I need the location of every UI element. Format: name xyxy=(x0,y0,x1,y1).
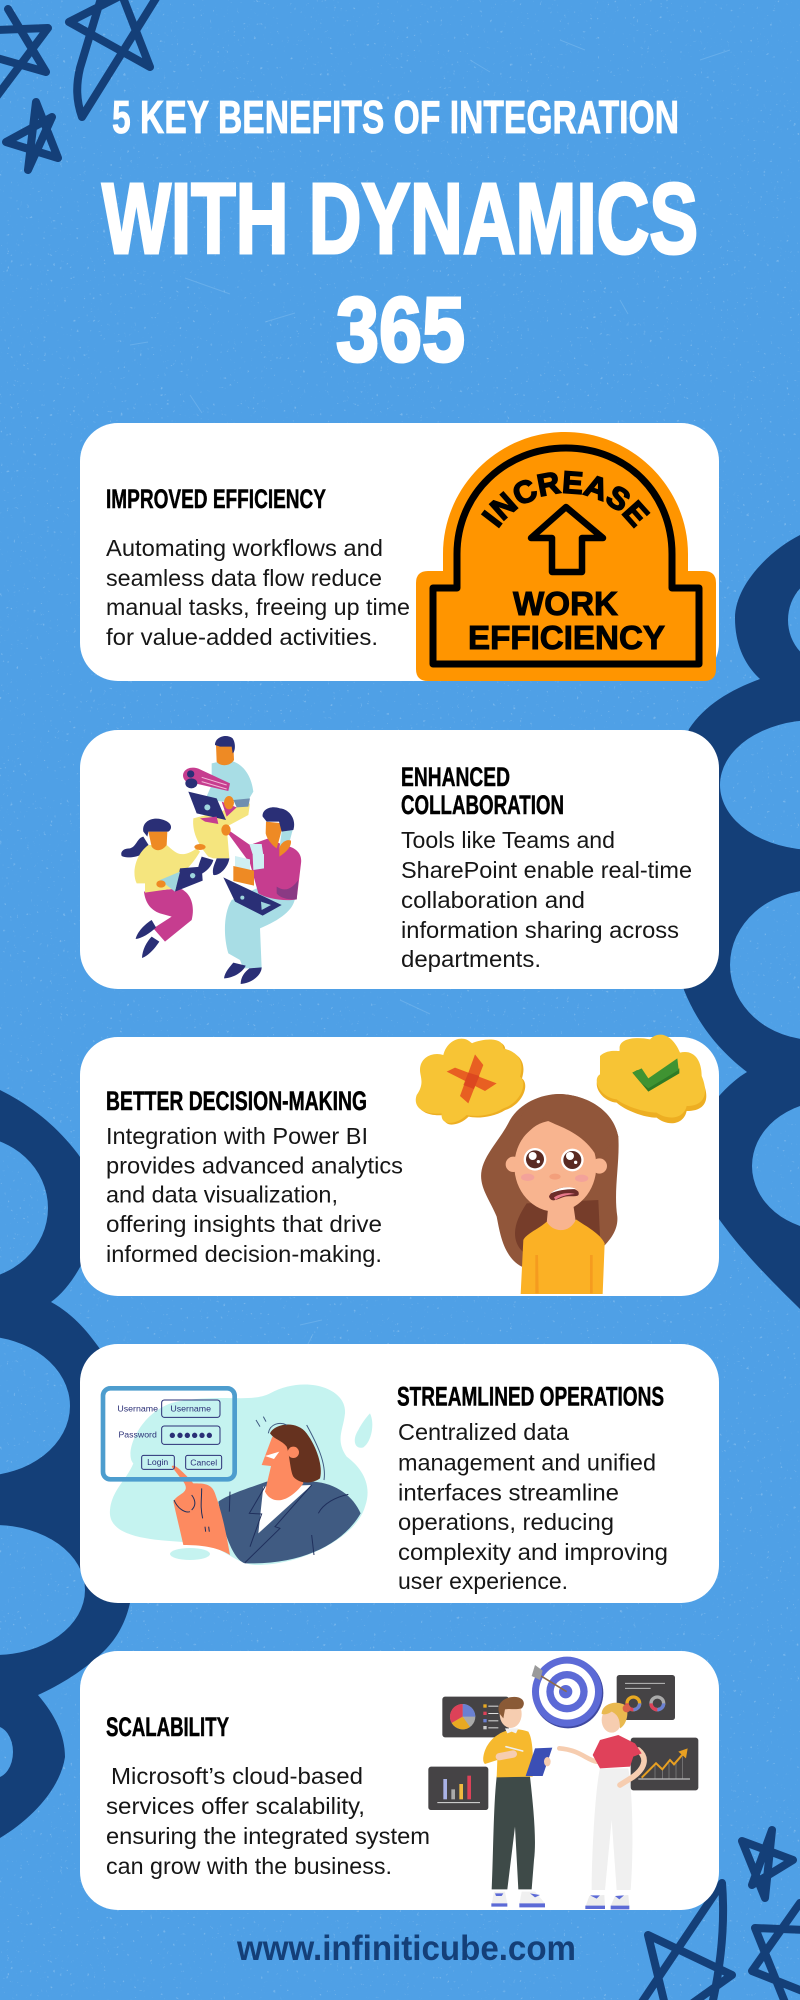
decorative blob: right scalloped ring xyxy=(670,500,800,1340)
heading: enhanced collaboration: ENHANCED xyxy=(401,762,510,792)
body text: enhanced collaboration: Tools like Teams and xyxy=(401,827,615,853)
body text: improved efficiency: manual tasks, freeing up time xyxy=(106,594,410,620)
heading: enhanced collaboration: COLLABORATION xyxy=(401,790,564,820)
body text: streamlined operations: user experience. xyxy=(398,1568,568,1594)
body text: scalability: can grow with the business. xyxy=(106,1853,392,1879)
illustration: person using login screen: Username xyxy=(117,1404,158,1414)
cloud with cross xyxy=(418,1040,525,1125)
girl xyxy=(481,1094,619,1267)
title xyxy=(102,91,698,381)
panel: better decision-making xyxy=(80,1035,719,1296)
body text: streamlined operations: Centralized data xyxy=(398,1419,569,1445)
bar chart xyxy=(437,1801,480,1804)
panel: improved efficiency xyxy=(80,423,719,681)
woman xyxy=(121,837,151,857)
heading: streamlined operations: STREAMLINED OPERATIONS xyxy=(397,1382,664,1412)
body text: scalability: ensuring the integrated system xyxy=(106,1823,430,1849)
chart panels xyxy=(442,1697,509,1737)
body text: streamlined operations: operations, reducing xyxy=(398,1509,614,1535)
heading: enhanced collaboration xyxy=(401,762,564,820)
illustration: person using login screen xyxy=(103,1384,372,1565)
donut charts xyxy=(625,1683,665,1688)
body text: better decision-making: informed decision-making. xyxy=(106,1241,382,1267)
illustration: person using login screen: Username xyxy=(170,1404,211,1414)
body text: better decision-making: Integration with Power BI xyxy=(106,1123,368,1149)
body text: scalability: services offer scalability, xyxy=(106,1793,365,1819)
target xyxy=(533,1658,603,1728)
body text: improved efficiency xyxy=(106,535,410,650)
panel: enhanced collaboration xyxy=(80,730,719,989)
cloud with check mark xyxy=(597,1038,706,1123)
body text: scalability: Microsoft’s cloud-based xyxy=(111,1763,363,1789)
body text: scalability xyxy=(106,1763,430,1879)
body text: better decision-making: and data visualization, xyxy=(106,1182,338,1208)
body text: streamlined operations xyxy=(398,1419,668,1594)
panel: streamlined operations xyxy=(80,1344,719,1603)
illustration: team collaborating with laptops xyxy=(121,736,301,984)
icon: hand-drawn stars top left xyxy=(0,0,158,170)
body text: improved efficiency: for value-added activities. xyxy=(106,624,378,650)
top man xyxy=(193,803,250,858)
heading: improved efficiency: IMPROVED EFFICIENCY xyxy=(106,484,326,514)
icon: increase work efficiency badge: INCREASE xyxy=(480,470,650,529)
body text: enhanced collaboration xyxy=(401,827,692,972)
body text: enhanced collaboration: SharePoint enable real-time xyxy=(401,857,692,883)
illustration: worried girl with cross and check clouds xyxy=(416,1035,706,1294)
icon: increase work efficiency badge: WORK xyxy=(513,585,618,622)
body text: streamlined operations: interfaces streamline xyxy=(398,1480,619,1506)
body text: better decision-making: provides advanced analytics xyxy=(106,1152,403,1178)
man xyxy=(492,1777,535,1889)
body text: better decision-making xyxy=(106,1123,403,1267)
body text: streamlined operations: complexity and improving xyxy=(398,1539,668,1565)
panel: scalability xyxy=(80,1651,719,1910)
heading: better decision-making: BETTER DECISION-MAKING xyxy=(106,1086,367,1116)
body text: enhanced collaboration: collaboration and xyxy=(401,887,585,913)
icon: hand-drawn stars bottom right xyxy=(640,1830,800,2000)
icon: increase work efficiency badge xyxy=(416,432,716,681)
body text: enhanced collaboration: information sharing across xyxy=(401,917,679,943)
footer: website url: www.infiniticube.com xyxy=(236,1929,576,1968)
right man xyxy=(225,888,295,968)
body text: improved efficiency: seamless data flow reduce xyxy=(106,565,382,591)
illustration: business team with target and charts xyxy=(428,1657,698,1909)
person xyxy=(218,1482,361,1563)
line chart xyxy=(638,1777,690,1780)
illustration: person using login screen: Cancel xyxy=(190,1458,217,1468)
pie chart xyxy=(450,1704,475,1729)
heading: scalability: SCALABILITY xyxy=(106,1712,229,1742)
title line: 365: 365 xyxy=(336,279,465,381)
body text: streamlined operations: management and unified xyxy=(398,1450,656,1476)
hand xyxy=(172,1466,230,1555)
decorative blob: left scalloped ring xyxy=(0,1080,147,1860)
body text: improved efficiency: Automating workflows and xyxy=(106,535,383,561)
body text: enhanced collaboration: departments. xyxy=(401,946,541,972)
body text: better decision-making: offering insights that drive xyxy=(106,1211,382,1237)
woman xyxy=(592,1768,632,1890)
icon: increase work efficiency badge: EFFICIENCY xyxy=(468,619,665,656)
illustration: person using login screen: Login xyxy=(147,1457,168,1467)
login window xyxy=(103,1388,235,1479)
illustration: person using login screen: Password xyxy=(118,1429,157,1439)
